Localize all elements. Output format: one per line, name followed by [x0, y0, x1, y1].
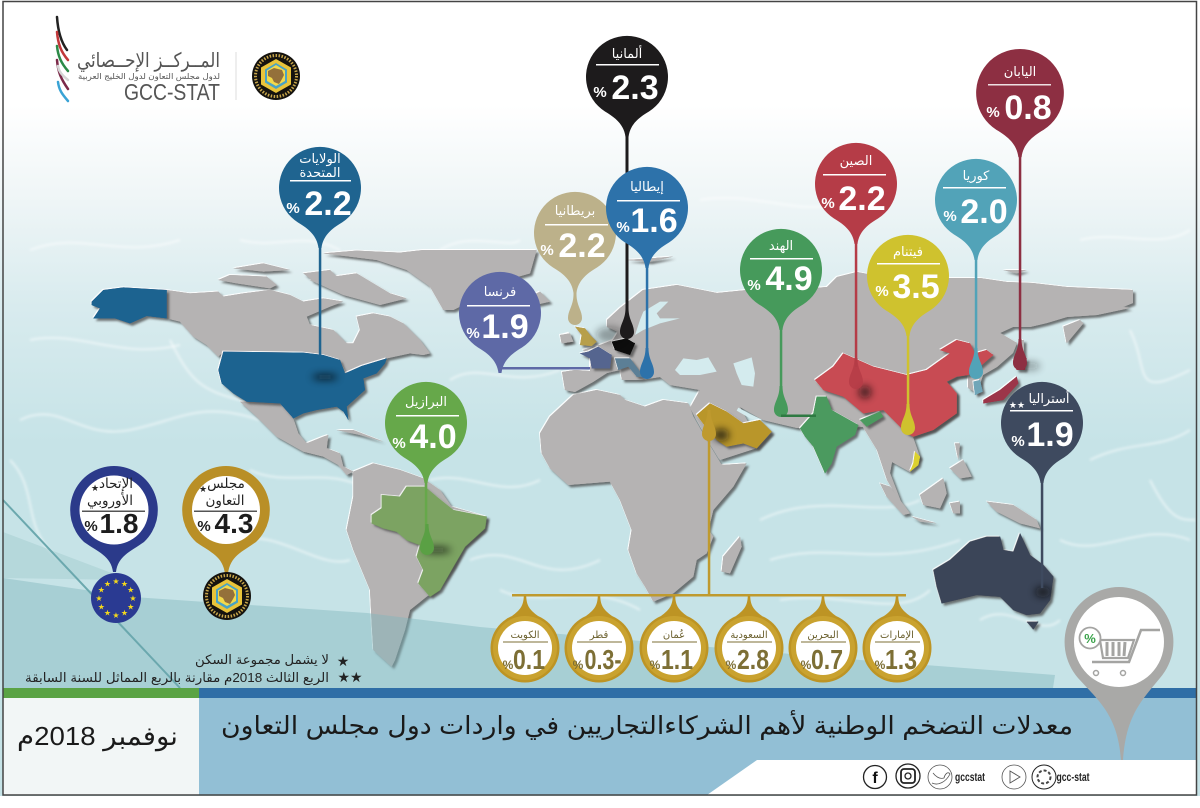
lower water bands [3, 532, 1055, 688]
coin: Kuwait [490, 596, 560, 682]
coin: Qatar [564, 596, 634, 682]
icon: GCC seal [203, 572, 251, 620]
pin: China [815, 143, 897, 389]
pin: United States: الولايات [299, 151, 341, 167]
Svalbard and Iceland [530, 257, 673, 343]
ribbon emblem [57, 17, 68, 101]
coin: Kuwait: الكويت [510, 630, 540, 641]
pin: Japan: اليابان [1004, 64, 1036, 79]
pin: China: % [821, 195, 835, 212]
Islands of Asia and Oceania [880, 443, 1040, 528]
pin: GCC Council [182, 466, 270, 620]
Russia Far East islands [1003, 270, 1083, 357]
pin: Brazil: % [392, 435, 406, 452]
icon: EU flag: ★ [121, 579, 128, 588]
footnote one: ★ [337, 653, 349, 669]
footnote one: لا يشمل مجموعة السكن [195, 652, 329, 668]
icon: EU flag: ★ [95, 594, 103, 603]
pin: Australia: % [1011, 433, 1025, 450]
icon: EU flag: ★ [127, 602, 134, 612]
pin: France [459, 272, 590, 373]
pin: Japan [976, 49, 1064, 370]
footer bars [3, 688, 1197, 795]
pin shadows on the map [312, 327, 1051, 597]
icon: EU flag: ★ [98, 602, 105, 612]
gulf connector lines [512, 410, 906, 596]
coin: Oman [640, 596, 708, 682]
pin: Vietnam: فيتنام [893, 244, 923, 259]
icon: instagram [896, 764, 920, 788]
pin: Italy: إيطاليا [630, 179, 664, 194]
pin: GCC Council: % [197, 518, 211, 535]
icon: EU flag: ★ [121, 609, 128, 618]
icon: EU flag: ★ [112, 577, 120, 586]
pin: United Kingdom: % [540, 242, 554, 259]
diagonal line [3, 500, 180, 688]
icon: EU flag [91, 573, 141, 623]
Eurasia [562, 272, 1133, 507]
pin: France: فرنسا [484, 284, 516, 300]
Brazil [372, 487, 487, 597]
pin: European Union: % [84, 518, 98, 535]
pin: GCC Council: ★ [199, 484, 207, 494]
pin: Vietnam: 3.5 [892, 268, 940, 306]
pin: United States: المتحدة [299, 165, 341, 180]
pin: Italy [606, 167, 688, 379]
coin: Qatar: % [573, 658, 584, 672]
pin: Germany: % [593, 84, 607, 101]
pin: Brazil [385, 382, 467, 555]
pin: United Kingdom: 2.2 [558, 227, 606, 265]
coin: Oman: % [650, 658, 661, 672]
land: grey continents [167, 250, 1133, 667]
coin: Qatar: 0.3- [584, 644, 622, 675]
coin: Oman: 1.1 [661, 644, 693, 675]
pin: GCC Council: التعاون [206, 493, 244, 509]
pin: United Kingdom: بريطانيا [555, 203, 595, 219]
pin: Japan: 0.8 [1004, 89, 1052, 127]
social media row [864, 764, 1090, 789]
icon: gcc network [1032, 765, 1056, 789]
European countries [560, 327, 643, 377]
pin: Korea: % [943, 208, 957, 225]
pin: China: الصين [840, 153, 872, 169]
world map [92, 250, 1133, 667]
pin: Japan: % [986, 104, 1000, 121]
pin: European Union: الإتحاد [99, 476, 133, 492]
pin: Korea: كوريا [963, 168, 990, 184]
coin: Kuwait: 0.1 [513, 644, 545, 675]
coin: Bahrain: 0.7 [811, 644, 843, 675]
coin: Oman: عُمان [663, 629, 685, 641]
icon: EU flag: ★ [104, 609, 111, 618]
coin: Saudi Arabia: % [726, 658, 737, 672]
logo: GCC-STAT [57, 17, 300, 105]
icon: facebook: f [872, 770, 878, 787]
pin: India: الهند [769, 238, 793, 254]
inland seas [635, 302, 762, 422]
pin: Australia: 1.9 [1026, 416, 1074, 454]
shopping cart pin [1065, 587, 1173, 760]
pin: United States: % [286, 200, 300, 217]
pin: India: % [747, 277, 761, 294]
coin: UAE: 1.3 [885, 644, 917, 675]
pin: Korea [935, 159, 1017, 379]
pin: United States: 2.2 [304, 185, 352, 223]
label: gccstat: gccstat [955, 770, 985, 784]
pin: Germany: ألمانيا [612, 45, 642, 61]
highlighted countries [92, 287, 1053, 629]
pin: European Union: ★ [91, 483, 99, 493]
Australia [933, 533, 1053, 629]
India [800, 397, 883, 473]
pin: European Union [70, 466, 158, 623]
pin: Australia: أستراليا [1028, 390, 1070, 407]
icon: EU flag: ★ [112, 611, 120, 620]
coin: Saudi Arabia [714, 596, 784, 682]
pin: India [740, 229, 822, 417]
pin: United States [279, 147, 361, 358]
coin: UAE: % [875, 658, 886, 672]
pin: India: 4.9 [765, 260, 813, 298]
Alaska and USA [92, 287, 387, 420]
pin: Vietnam [867, 235, 949, 435]
icon: youtube play [1002, 765, 1026, 789]
pin: Korea: 2.0 [960, 193, 1008, 231]
icon: EU flag: ★ [127, 586, 134, 594]
pin: Italy: 1.6 [630, 202, 678, 240]
icon: EU flag: ★ [104, 579, 111, 588]
icon: EU flag: ★ [98, 586, 105, 594]
coin: UAE: الإمارات [880, 630, 914, 641]
logo wordmark: GCC-STAT [124, 79, 220, 105]
coin: Bahrain: % [801, 658, 812, 672]
coin: Saudi Arabia: 2.8 [737, 644, 769, 675]
Gulf country coins [490, 596, 932, 682]
coin: Bahrain [788, 596, 858, 682]
pin: China: 2.2 [838, 180, 886, 218]
pin: Brazil: البرازيل [405, 394, 447, 410]
water caustic highlights [10, 198, 1196, 626]
logo Arabic name: المــركــز الإحــصائي [77, 50, 220, 73]
pin: Brazil: 4.0 [409, 418, 457, 456]
coin: Bahrain: البحرين [807, 630, 839, 641]
icon: twitter [928, 765, 952, 789]
GCC seal [252, 52, 300, 100]
pin: Australia [1001, 382, 1083, 588]
Saudi Arabia / GCC region [697, 403, 772, 448]
pin: European Union: 1.8 [100, 508, 138, 539]
pin: GCC Council: مجلس [207, 476, 245, 492]
label: gcc-stat: gcc-stat [1056, 770, 1090, 784]
pin: France: % [466, 325, 480, 342]
coin: Kuwait: % [503, 658, 514, 672]
pin: United Kingdom [534, 192, 616, 325]
footer title: معدلات التضخم الوطنية لأهم الشركاءالتجاريين في واردات دول مجلس التعاون [221, 709, 1073, 741]
Vietnam [910, 452, 920, 472]
North America, Greenland and Arctic islands [167, 250, 537, 667]
footnote two: ★★ [337, 669, 363, 685]
coin: Qatar: قطر [589, 630, 608, 641]
coin: UAE [862, 596, 932, 682]
pin: Australia: ★★ [1009, 400, 1025, 410]
pin: European Union: الأوروبي [87, 492, 133, 509]
pin: GCC Council: 4.3 [215, 508, 253, 539]
pin: Vietnam: % [875, 283, 889, 300]
logo subtitle: لدول مجلس التعاون لدول الخليج العربية [78, 72, 220, 81]
pin: Germany [586, 36, 668, 339]
pin: France: 1.9 [481, 308, 529, 346]
icon: cart: % [1084, 631, 1096, 646]
icon: EU flag: ★ [129, 594, 137, 603]
Africa and Madagascar [540, 390, 747, 602]
footer date: نوفمبر 2018م [17, 721, 178, 752]
icon: facebook [864, 766, 886, 788]
South Korea [973, 380, 983, 395]
China and Japan [815, 340, 993, 437]
coin: Saudi Arabia: السعودية [730, 630, 768, 641]
footnote two: الربع الثالث 2018م مقارنة بالربع المماثل للسنة السابقة [25, 670, 329, 686]
pin: Italy: % [616, 219, 630, 236]
icon: cart [1080, 628, 1160, 676]
footnotes [25, 652, 363, 686]
pin: Germany: 2.3 [611, 69, 659, 107]
